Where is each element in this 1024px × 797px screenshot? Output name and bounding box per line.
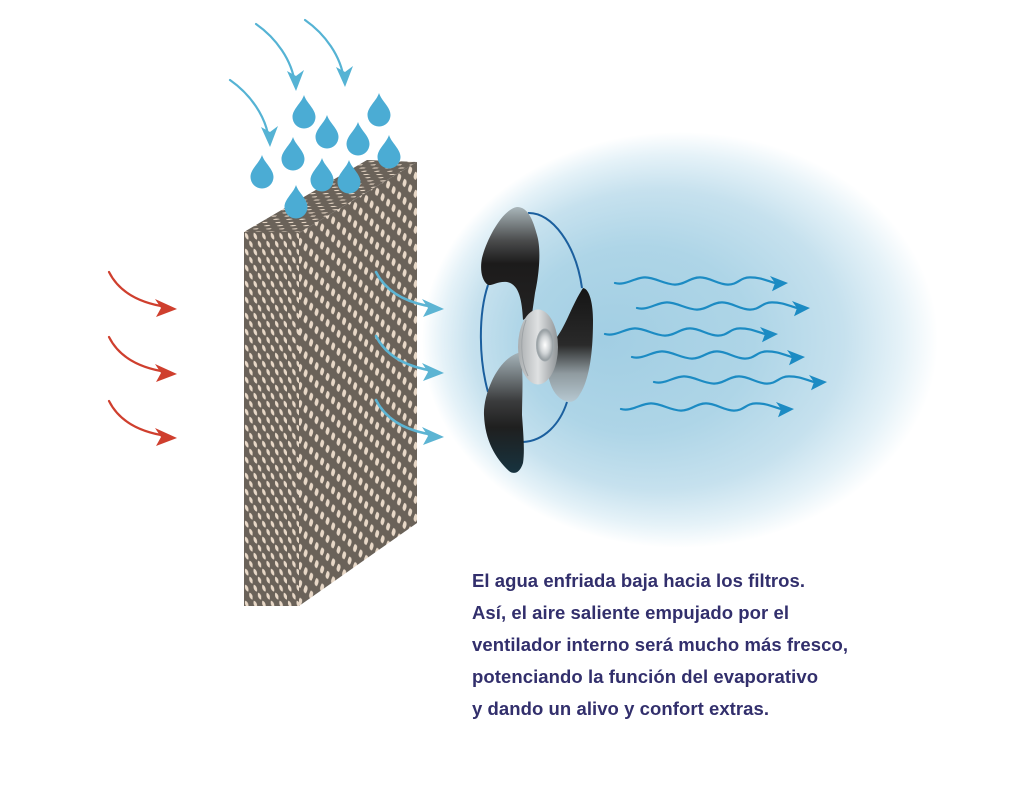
fan blade right (548, 288, 593, 402)
cooled air leaving pad arrows (376, 272, 444, 445)
blue cool-air glow (422, 132, 938, 548)
pad side face (299, 162, 417, 606)
fan blade bottom (484, 353, 524, 473)
water falling arrows (230, 20, 353, 147)
explanatory text: El agua enfriada baja hacia los filtros. (472, 570, 805, 591)
fan (481, 207, 593, 473)
explanatory text (472, 570, 848, 719)
evaporative cooling pad (244, 160, 417, 606)
pad top face (244, 160, 417, 233)
pad front face (244, 232, 299, 606)
explanatory text: Así, el aire saliente empujado por el (472, 602, 789, 623)
explanatory text: y dando un alivo y confort extras. (472, 698, 769, 719)
fan hub center (536, 329, 554, 361)
outgoing air wave arrows (605, 276, 827, 417)
explanatory text: ventilador interno será mucho más fresco, (472, 634, 848, 655)
fan hub (518, 310, 558, 384)
water drops (250, 93, 400, 218)
explanatory text: potenciando la función del evaporativo (472, 666, 818, 687)
hot air intake arrows (109, 272, 177, 446)
fan ring (481, 213, 582, 442)
fan blade top (481, 207, 539, 320)
